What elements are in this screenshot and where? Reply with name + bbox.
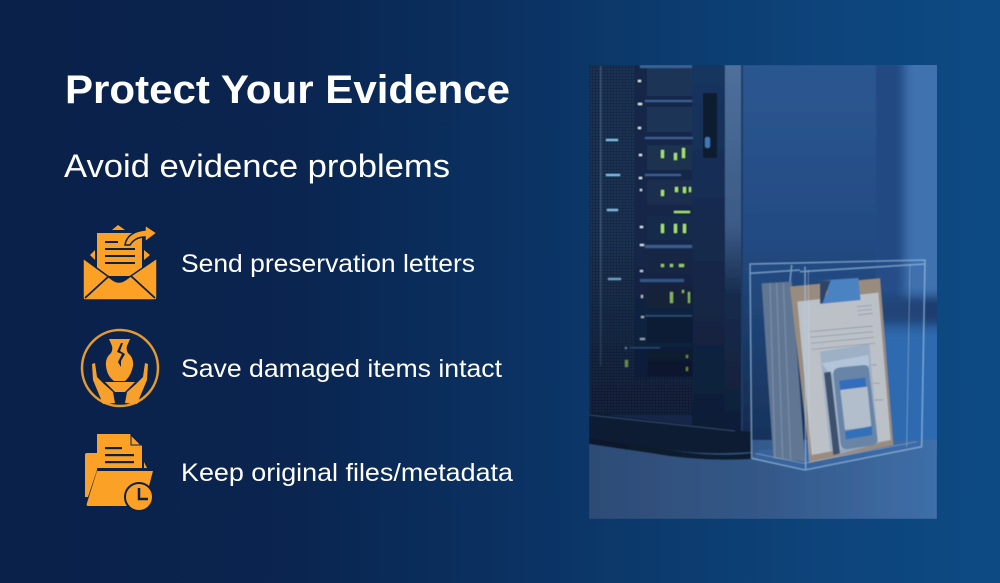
subtitle: Avoid evidence problems (64, 148, 450, 184)
title: Protect Your Evidence (65, 68, 510, 112)
front pane tint (752, 278, 922, 462)
strap (824, 372, 840, 455)
icon: envelope with letter (83, 225, 157, 300)
tan folder (790, 278, 893, 463)
photo: server rack with evidence box (589, 55, 950, 519)
icon: hands holding cracked vase (82, 330, 158, 406)
label: Send preservation letters (181, 250, 475, 278)
gray file stack (762, 282, 805, 462)
floor (589, 440, 937, 519)
white document (797, 293, 891, 455)
list item: preservation letters (83, 225, 475, 300)
status LEDs green (625, 148, 691, 371)
photo background wall (884, 322, 937, 332)
rack top strips (630, 65, 693, 348)
clipboard clip (820, 278, 861, 304)
status LEDs white (638, 80, 645, 340)
list item: damaged items (82, 330, 502, 406)
door handle (703, 93, 717, 158)
rack mesh bottom (590, 378, 693, 414)
server base (589, 413, 752, 453)
acrylic edges (750, 260, 925, 470)
label: Save damaged items intact (181, 355, 502, 383)
rack units (590, 65, 693, 415)
server stile (692, 65, 725, 450)
list item: original files (85, 434, 513, 511)
icon: folder with document and clock (85, 434, 153, 511)
server side panel (742, 65, 876, 450)
drive device (833, 365, 877, 449)
box floor (754, 448, 822, 469)
status LEDs blue (606, 139, 627, 349)
blurred background server (876, 65, 937, 450)
label: Keep original files/metadata (181, 459, 513, 487)
storage bag (820, 344, 878, 454)
server front (589, 65, 692, 440)
evidence box (750, 260, 925, 470)
